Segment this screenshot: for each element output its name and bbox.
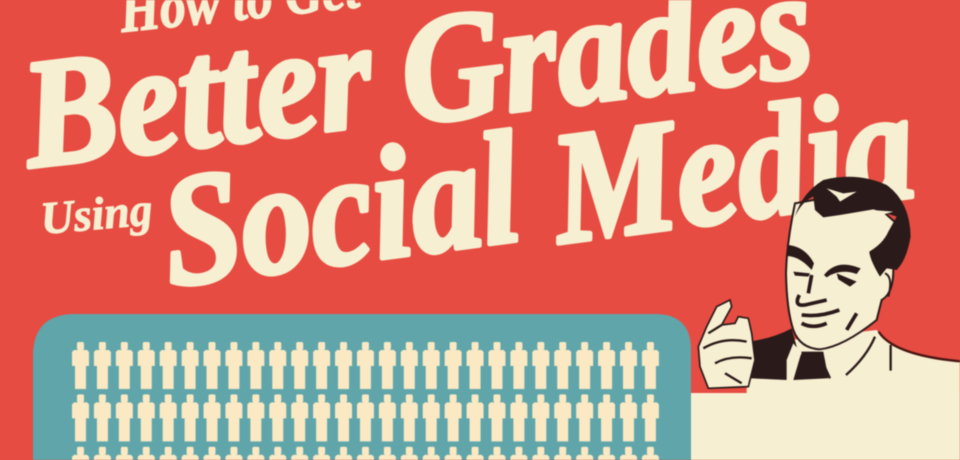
- title word: Social: Social: [151, 97, 530, 321]
- shoulders: [747, 330, 960, 397]
- title: [11, 0, 923, 321]
- brows and eyes: [787, 245, 861, 287]
- people icon grid: [70, 341, 662, 460]
- illustration: retro man winking: [698, 177, 960, 397]
- title word: Using: Using: [38, 183, 154, 244]
- finger lines: [703, 325, 752, 383]
- hair: [795, 177, 911, 277]
- panel: teal people count: [33, 314, 691, 460]
- ear: [885, 273, 890, 297]
- face: [786, 197, 900, 349]
- jacket shadow: [748, 328, 797, 380]
- tie and collar: [793, 352, 828, 380]
- panel: cream area below figure: [691, 393, 960, 460]
- hand: [698, 300, 755, 388]
- nose, mouth and cheek lines: [797, 275, 857, 330]
- hair highlight: [827, 188, 893, 215]
